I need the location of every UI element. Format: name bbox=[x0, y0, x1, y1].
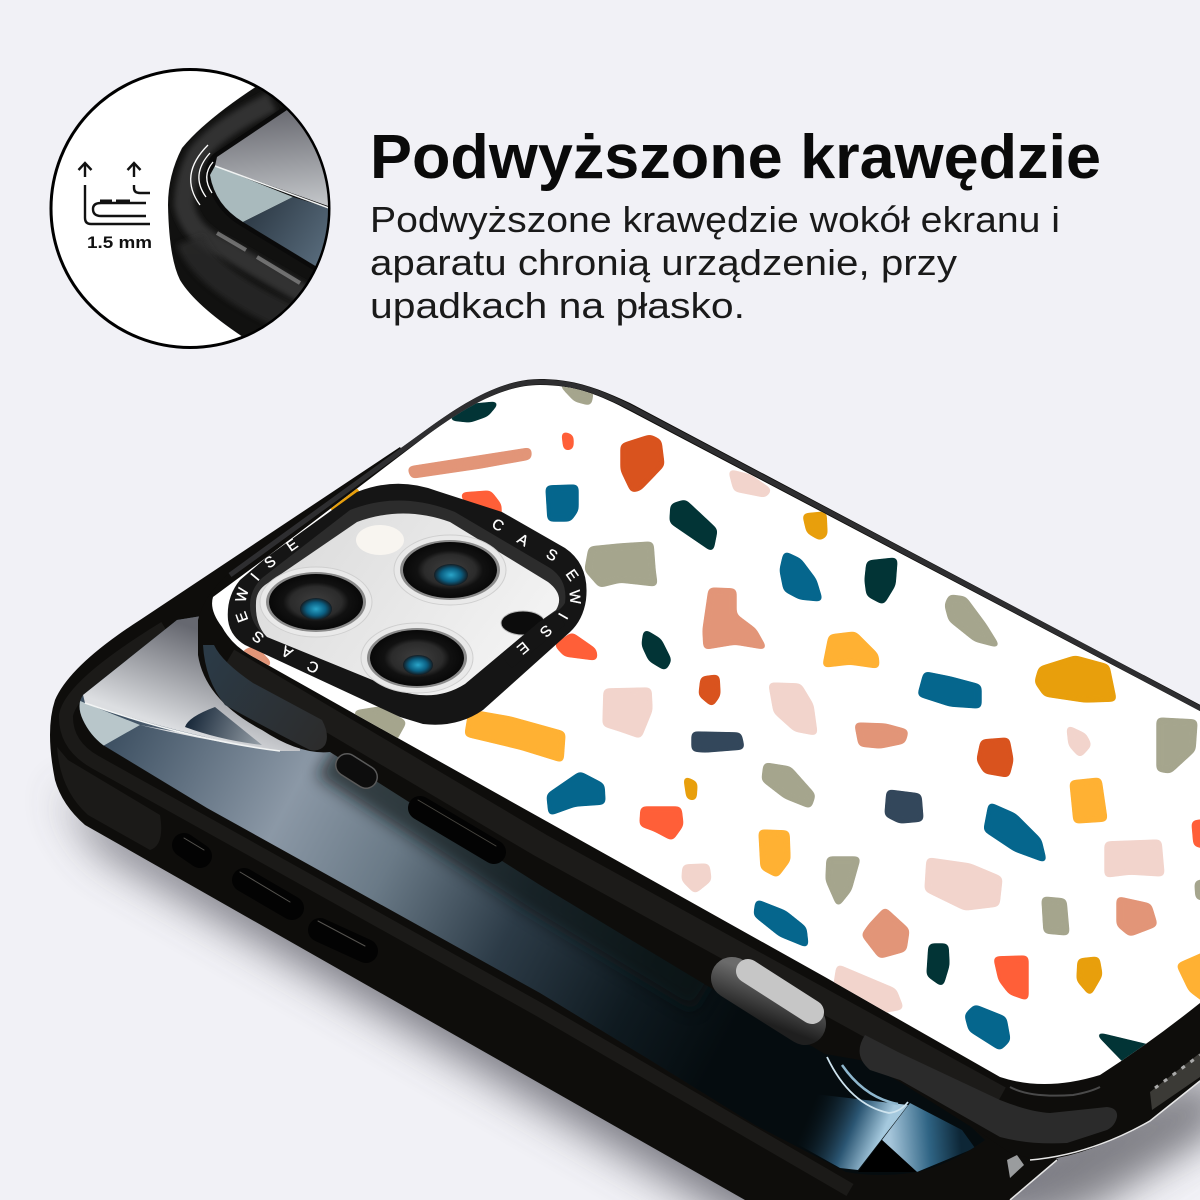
CASEWISE ring text: E bbox=[562, 566, 582, 584]
lens: bottom bbox=[361, 623, 473, 693]
CASEWISE ring text: E bbox=[233, 609, 252, 624]
camera module bbox=[228, 484, 587, 725]
icon label: 1.5 mm bbox=[87, 233, 152, 252]
rear phone lower-right detail bbox=[1007, 1155, 1024, 1178]
CASEWISE ring text: W bbox=[565, 589, 584, 606]
camera ring bbox=[228, 484, 587, 725]
CASEWISE ring text: S bbox=[543, 546, 560, 565]
rear buttons bbox=[184, 838, 366, 951]
corner grip bbox=[860, 1035, 1117, 1143]
case edge line bbox=[1030, 1081, 1200, 1160]
top rim line bbox=[230, 382, 1200, 711]
CASEWISE ring text: S bbox=[261, 553, 279, 572]
corner grip texture bbox=[57, 747, 161, 850]
mute switch bbox=[347, 765, 366, 777]
body text: Podwyższone krawędzie wokół ekranu i bbox=[370, 199, 1060, 240]
rear phone: screen facing up bbox=[50, 447, 1060, 1200]
CASEWISE ring text bbox=[232, 515, 584, 677]
icon: 1.5 mm raised edge diagram bbox=[78, 163, 150, 224]
ring segment over lidar bbox=[500, 610, 565, 668]
drop shadow: lower right bbox=[1010, 1070, 1200, 1200]
bumper band highlight bbox=[228, 660, 1000, 1098]
case body bbox=[198, 379, 1200, 1158]
body text: upadkach na płasko. bbox=[370, 285, 745, 326]
title: Podwyższone krawędzie bbox=[370, 123, 1101, 192]
CASEWISE ring text: I bbox=[554, 610, 571, 622]
CASEWISE ring text: A bbox=[279, 642, 296, 661]
body text bbox=[370, 199, 1060, 326]
lens: left bbox=[260, 567, 372, 637]
CASEWISE ring text: S bbox=[536, 621, 555, 640]
screen bbox=[80, 616, 984, 1175]
lens: right bbox=[394, 535, 506, 605]
pattern panel bbox=[200, 370, 1200, 1100]
CASEWISE ring text: E bbox=[513, 638, 532, 657]
CASEWISE ring text: W bbox=[232, 585, 253, 604]
CASEWISE ring text: A bbox=[514, 531, 531, 550]
drop shadow bbox=[60, 790, 1200, 1200]
power button bbox=[418, 800, 496, 852]
CASEWISE ring text: C bbox=[489, 515, 507, 536]
rear phone edge line bbox=[1010, 1160, 1057, 1200]
lidar bbox=[501, 611, 545, 635]
CASEWISE ring text: C bbox=[304, 656, 322, 677]
icon: shock arcs bbox=[191, 145, 213, 205]
CASEWISE ring text: E bbox=[283, 536, 301, 555]
CASEWISE ring text: S bbox=[249, 627, 267, 647]
circular inset: raised edge close-up bbox=[51, 60, 345, 348]
corner highlight bbox=[1010, 1087, 1100, 1096]
charging port bbox=[732, 971, 812, 1024]
speaker grille bbox=[1150, 1053, 1200, 1110]
front phone: back of case with terrazzo pattern bbox=[198, 370, 1200, 1160]
bumper highlight bbox=[66, 628, 850, 1190]
rear phone bumper bbox=[50, 447, 1058, 1200]
case corner photo bbox=[168, 87, 328, 336]
camera plate bbox=[256, 514, 559, 695]
camera side grip bbox=[203, 645, 327, 750]
flash bbox=[356, 525, 404, 555]
body text: aparatu chronią urządzenie, przy bbox=[370, 242, 957, 283]
CASEWISE ring text: I bbox=[248, 570, 263, 584]
